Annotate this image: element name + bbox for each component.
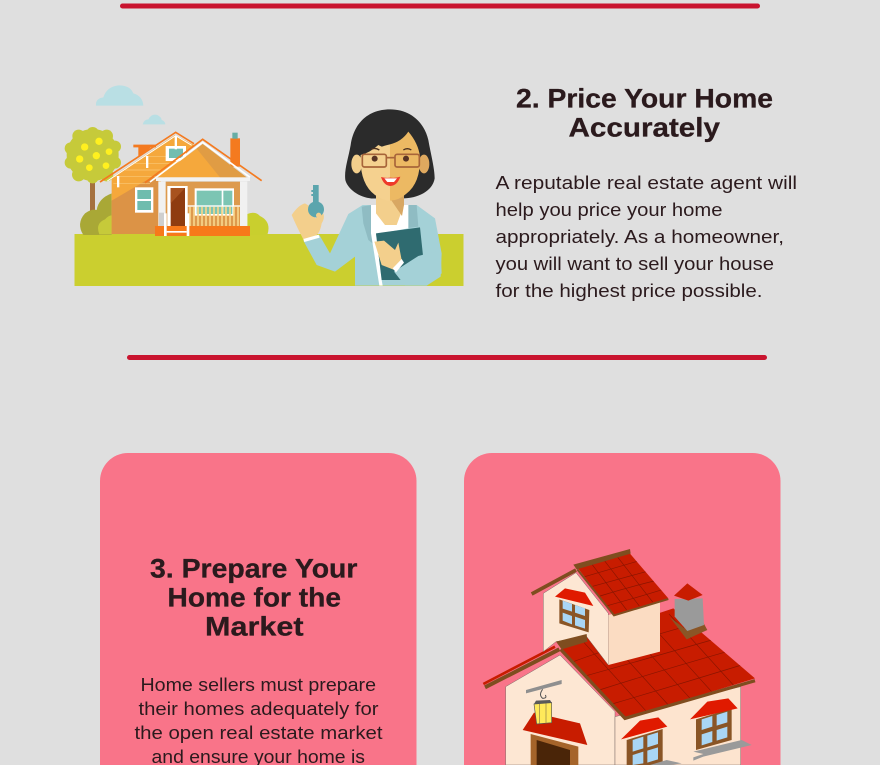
agent face <box>351 132 429 201</box>
section 2 body text: for the highest price possible. <box>496 281 762 301</box>
front door <box>167 186 188 227</box>
panel: prepare your home text card <box>100 453 416 765</box>
section 2 body text: help you price your home <box>496 200 722 220</box>
dormer window <box>166 136 186 161</box>
illustration: red roof house <box>483 549 755 765</box>
right chimney <box>230 133 240 167</box>
section 2 body text: A reputable real estate agent will <box>496 173 797 193</box>
porch window <box>195 188 234 216</box>
front gable <box>145 139 262 183</box>
side window <box>135 187 153 213</box>
section 2 body text: you will want to sell your house <box>496 254 774 274</box>
front windows <box>621 698 752 765</box>
section 3 body text: their homes adequately for <box>138 699 378 719</box>
icon: book <box>376 227 424 280</box>
icon: bushes <box>80 193 269 235</box>
agent raised hand <box>292 203 324 242</box>
door and awning <box>523 703 587 765</box>
house walls <box>112 135 242 234</box>
section 2 body text <box>496 173 797 301</box>
agent right arm and hand <box>374 241 442 286</box>
section 3 body text: Home sellers must prepare <box>140 675 376 695</box>
icon: back chimney <box>133 145 156 157</box>
house walls <box>506 655 741 765</box>
section 2 heading <box>516 84 773 142</box>
section 3 heading: 3. Prepare Your <box>150 554 358 584</box>
chimney <box>670 583 707 639</box>
section 2 heading: 2. Price Your Home <box>516 84 773 114</box>
section 2 body text: appropriately. As a homeowner, <box>496 227 784 247</box>
porch base and steps <box>155 213 250 236</box>
agent neck <box>376 190 404 225</box>
section 3 body text: the open real estate market <box>134 723 382 743</box>
illustration: real estate agent with key <box>292 109 442 286</box>
top divider <box>120 4 760 8</box>
lantern <box>526 680 562 704</box>
agent jacket <box>303 205 442 286</box>
section 3 heading <box>150 554 358 642</box>
porch columns <box>158 181 247 227</box>
middle divider <box>127 355 767 360</box>
agent hair <box>345 109 435 199</box>
section 3 heading: Home for the <box>168 582 341 612</box>
icon: key <box>308 185 324 218</box>
upper dormer <box>532 549 668 665</box>
porch railing <box>188 205 240 226</box>
icon: fruit tree <box>65 127 121 211</box>
section 3 heading: Market <box>205 612 304 642</box>
main roof <box>483 608 755 718</box>
dormer window <box>555 588 593 632</box>
panel: house illustration card <box>464 453 780 765</box>
section 2 heading: Accurately <box>568 112 720 142</box>
back roof line <box>100 132 194 182</box>
illustration: suburban house <box>65 85 269 236</box>
section 3 body text <box>134 675 382 765</box>
icon: clouds <box>96 85 165 124</box>
illustration: ground strip <box>74 234 464 286</box>
